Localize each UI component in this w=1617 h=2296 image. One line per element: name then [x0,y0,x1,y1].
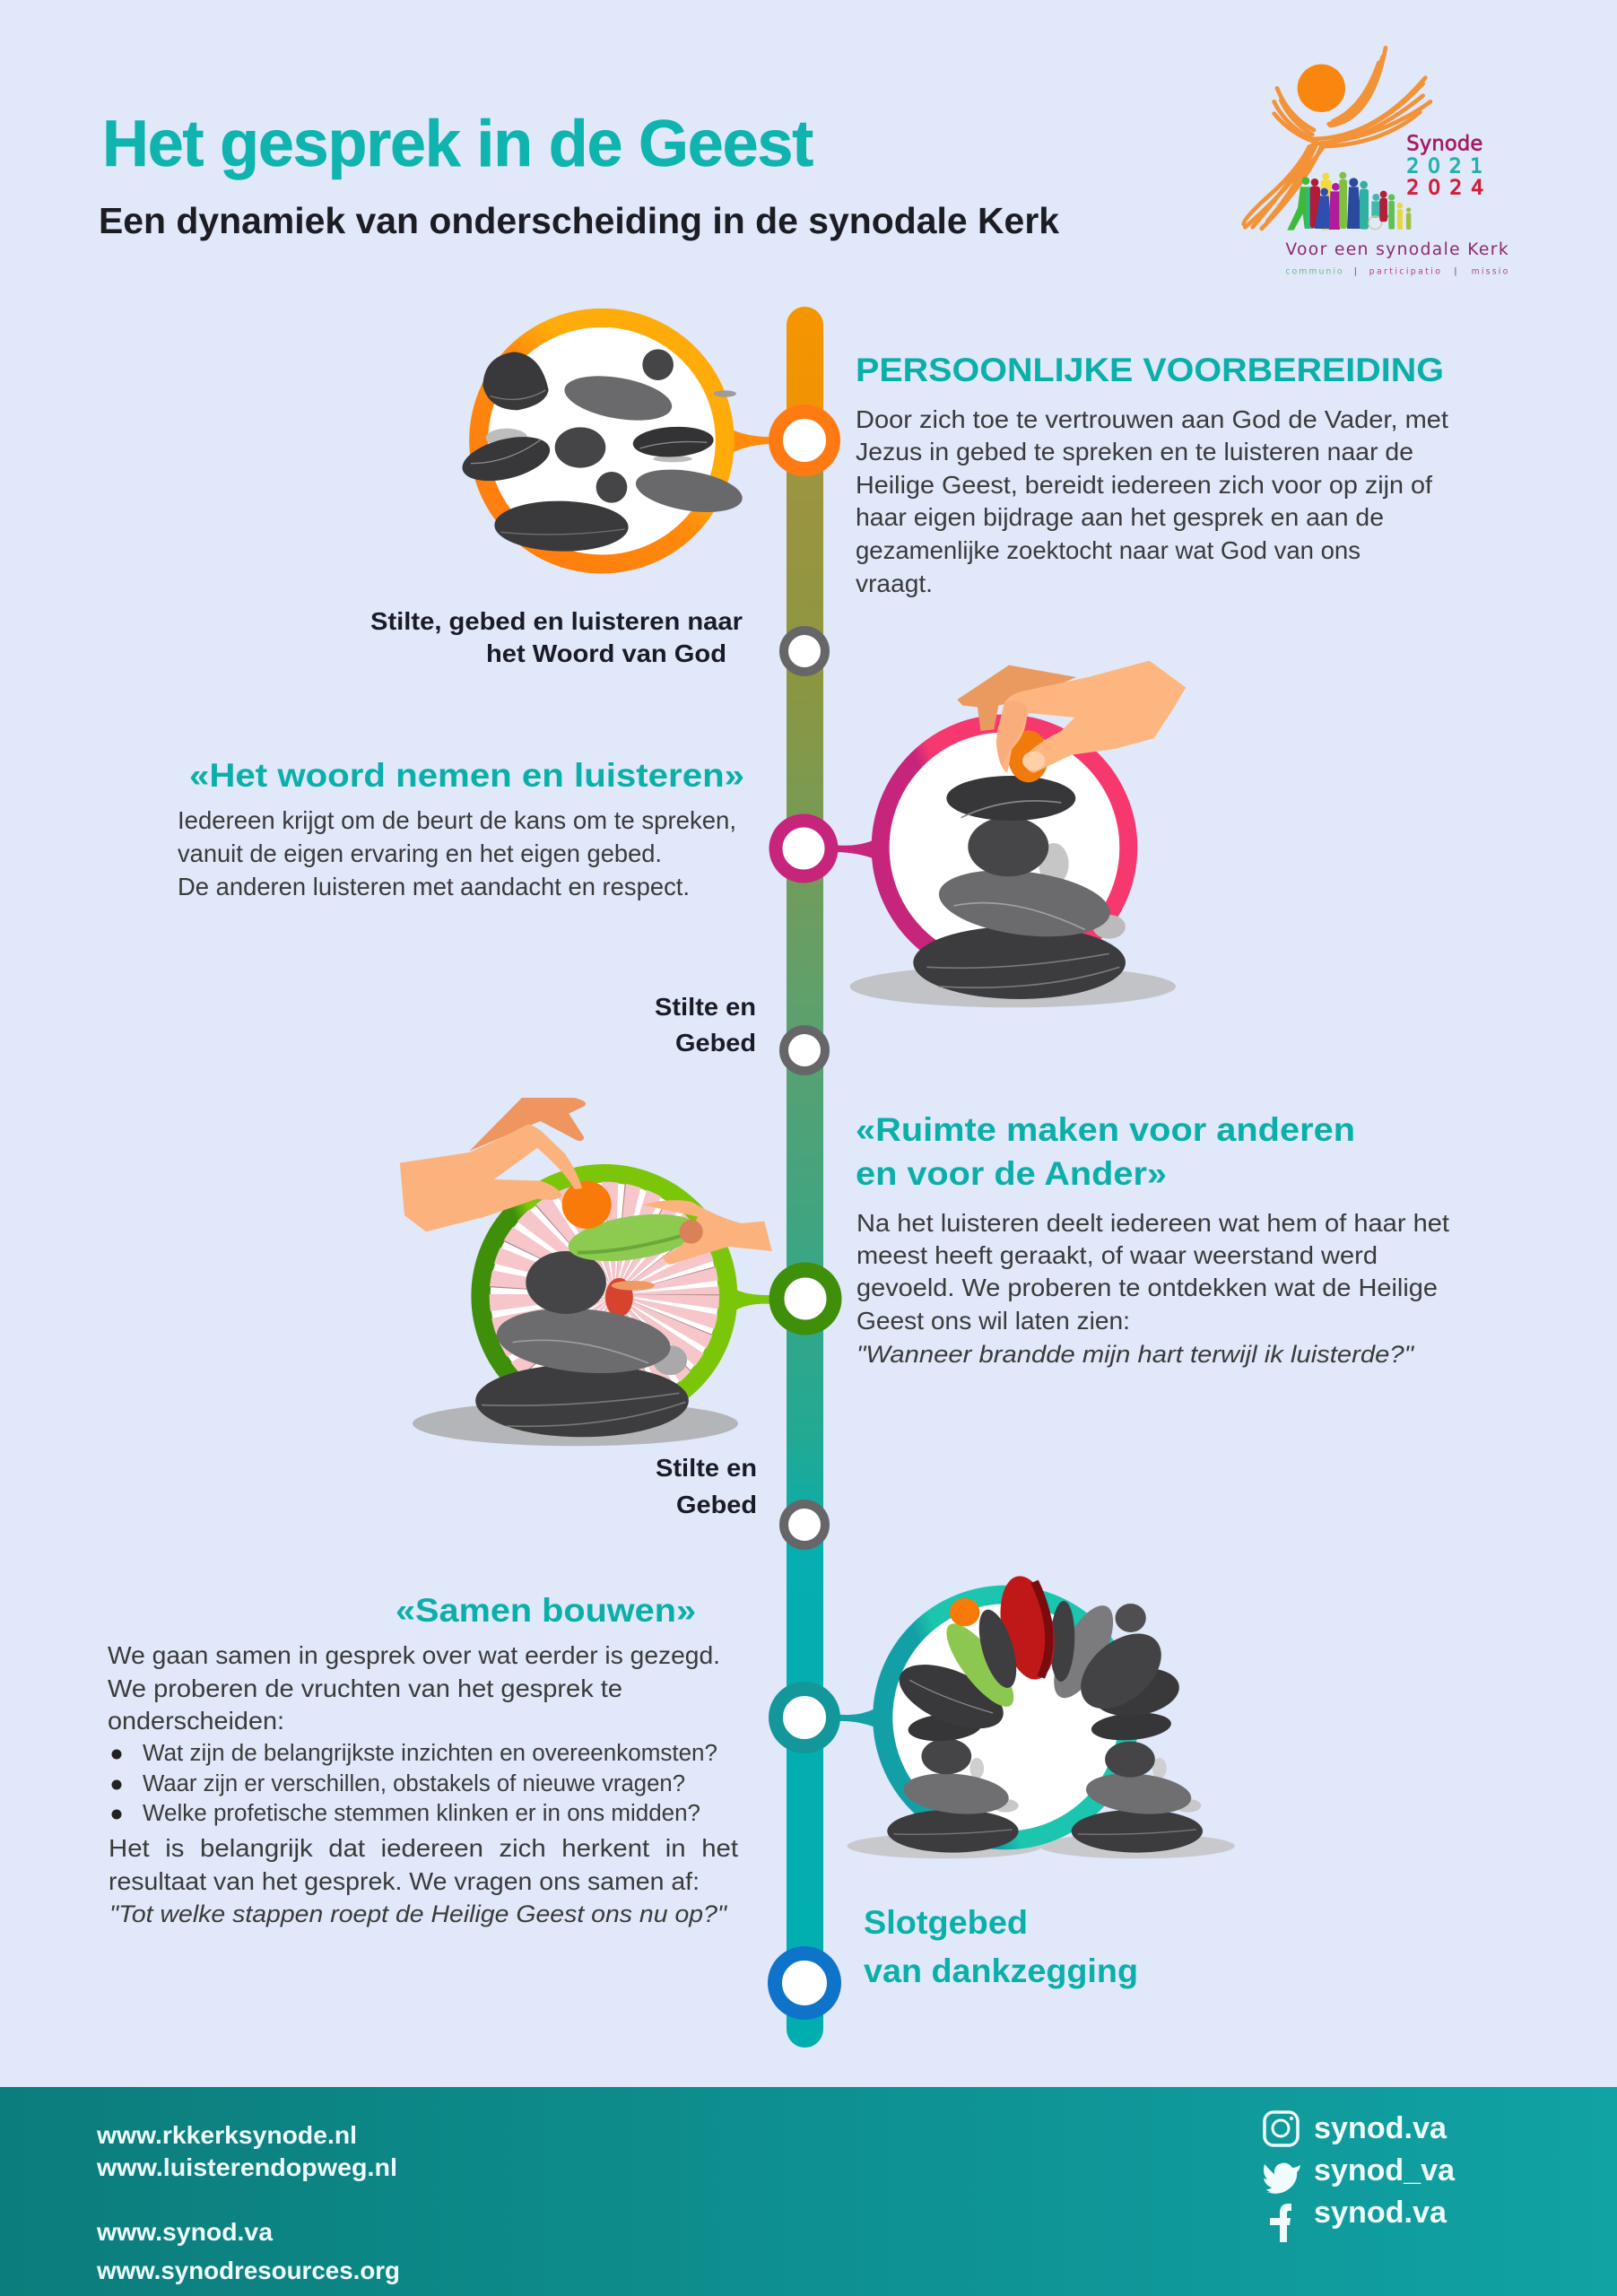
text block: het woord nemen [178,806,736,900]
node: slotgebed [775,1953,834,2013]
text block: samen bouwen: Waar zijn er verschillen, obstakels of nieuwe vragen? [143,1771,685,1796]
connector: disc 2 to node [834,839,875,859]
text block: ruimte maken: gevoeld. We proberen te ontdekken wat de Heilige [856,1274,1438,1301]
text block: samen bouwen: "Tot welke stappen roept de Heilige Geest ons nu op?" [109,1900,727,1927]
label: stilte en gebed 1 [655,993,756,1057]
footer social handles: synod.va [1314,2196,1447,2230]
label: stilte en gebed 2: Gebed [676,1491,757,1518]
label: stilte, gebed en luisteren: Stilte, gebed en luisteren naar [370,607,743,635]
text block: samen bouwen [108,1641,738,1927]
title: Het gesprek in de Geest [102,108,813,180]
logo: Synode 2021-2024: Synode [1406,132,1482,155]
node: samen bouwen [776,1689,833,1746]
heading: ruimte maken: «Ruimte maken voor anderen [856,1111,1355,1148]
heading: persoonlijke voorbereiding: PERSOONLIJKE VOORBEREIDING [856,352,1444,388]
footer band [0,2087,1617,2296]
label: stilte, gebed en luisteren [370,607,743,667]
text block: ruimte maken: Geest ons wil laten zien: [856,1307,1130,1335]
illustration: scattered stones in orange circle [457,317,745,564]
text block: ruimte maken: meest heeft geraakt, of waar weerstand werd [856,1241,1378,1269]
footer social handles: synod_va [1314,2153,1456,2187]
logo: Synode 2021-2024: 2024 [1406,178,1483,200]
text block: samen bouwen: Het is belangrijk dat iedereen zich herkent in het [109,1834,738,1862]
illustration: stone stack, two hands and green circle [400,1098,772,1446]
node: silence 2 [784,1030,825,1071]
node: silence 1 [784,631,825,672]
node: silence 3 [784,1504,825,1545]
heading: slotgebed van dankzegging: Slotgebed [864,1904,1028,1941]
text block: ruimte maken: "Wanneer brandde mijn hart terwijl ik luisterde?" [856,1341,1415,1368]
text block: persoonlijke voorbereiding: gezamenlijke zoektocht naar wat God van ons [856,536,1361,564]
text block: ruimte maken: Na het luisteren deelt iedereen wat hem of haar het [856,1209,1449,1237]
heading: slotgebed van dankzegging [864,1904,1138,1989]
icon: twitter [1264,2163,1300,2195]
text block: samen bouwen: Wat zijn de belangrijkste inzichten en overeenkomsten? [143,1741,717,1766]
footer website links: www.synodresources.org [96,2257,400,2284]
text block: persoonlijke voorbereiding: vraagt. [856,570,933,597]
text block: het woord nemen: vanuit de eigen ervaring en het eigen gebed. [178,839,662,867]
logo: Synode 2021-2024: 2021 [1406,155,1482,178]
text block: samen bouwen: onderscheiden: [108,1707,284,1735]
logo: Synode 2021-2024: | [1354,266,1357,276]
label: stilte en gebed 2 [656,1454,757,1518]
heading: samen bouwen: «Samen bouwen» [396,1592,696,1629]
text block: persoonlijke voorbereiding [856,405,1448,597]
footer social handles [1314,2111,1456,2230]
heading: slotgebed van dankzegging: van dankzegging [864,1952,1138,1989]
icon: facebook [1270,2204,1291,2242]
text block: ruimte maken [856,1209,1449,1368]
text block: het woord nemen: Iedereen krijgt om de beurt de kans om te spreken, [178,806,736,834]
heading: het woord nemen: «Het woord nemen en luisteren» [189,757,744,794]
connector: disc 4 to node [836,1709,875,1727]
connector: disc 1 to node [730,429,773,454]
label: stilte en gebed 1: Stilte en [655,993,756,1021]
illustration: two stone stacks forming arch in teal circle [848,1572,1235,1858]
illustration: stone stack and hand with pink circle [850,661,1186,1007]
logo: Synode 2021-2024: missio [1472,266,1508,276]
text block: persoonlijke voorbereiding: Door zich toe te vertrouwen aan God de Vader, met [856,405,1448,433]
text block: samen bouwen: Welke profetische stemmen klinken er in ons midden? [143,1801,700,1826]
text block: persoonlijke voorbereiding: Jezus in gebed te spreken en te luisteren naar de [856,438,1413,465]
text block: samen bouwen: We gaan samen in gesprek over wat eerder is gezegd. [108,1641,720,1669]
label: stilte en gebed 1: Gebed [675,1029,756,1057]
logo: Synode 2021-2024 [1244,48,1508,276]
text block: persoonlijke voorbereiding: Heilige Geest, bereidt iedereen zich voor op zijn of [856,471,1432,499]
text block: samen bouwen: We proberen de vruchten van het gesprek te [108,1674,622,1702]
label: stilte en gebed 2: Stilte en [656,1454,757,1482]
text block: samen bouwen: resultaat van het gesprek. We vragen ons samen af: [109,1867,700,1895]
subtitle: Een dynamiek van onderscheiding in de synodale Kerk [99,200,1059,241]
logo: Synode 2021-2024: Voor een synodale Kerk [1285,240,1508,259]
logo: Synode 2021-2024: participatio [1369,266,1440,276]
logo: Synode 2021-2024: | [1455,266,1456,276]
node: het woord nemen [776,821,831,876]
footer social handles: synod.va [1314,2111,1447,2145]
footer website links: www.synod.va [96,2218,273,2246]
icon: instagram [1265,2112,1298,2145]
node: personal preparation [776,412,833,469]
connector: disc 3 to node [734,1289,773,1311]
footer website links: www.luisterendopweg.nl [96,2153,397,2181]
footer website links: www.rkkerksynode.nl [96,2121,357,2149]
logo: Synode 2021-2024: communio [1285,266,1343,276]
heading: ruimte maken [856,1111,1355,1192]
node: ruimte maken [777,1270,834,1327]
vertical timeline [787,307,823,2048]
text block: persoonlijke voorbereiding: haar eigen bijdrage aan het gesprek en aan de [856,503,1384,531]
label: stilte, gebed en luisteren: het Woord van God [486,639,726,667]
text block: het woord nemen: De anderen luisteren met aandacht en respect. [178,873,690,900]
heading: ruimte maken: en voor de Ander» [856,1155,1167,1192]
footer website links [96,2121,400,2284]
